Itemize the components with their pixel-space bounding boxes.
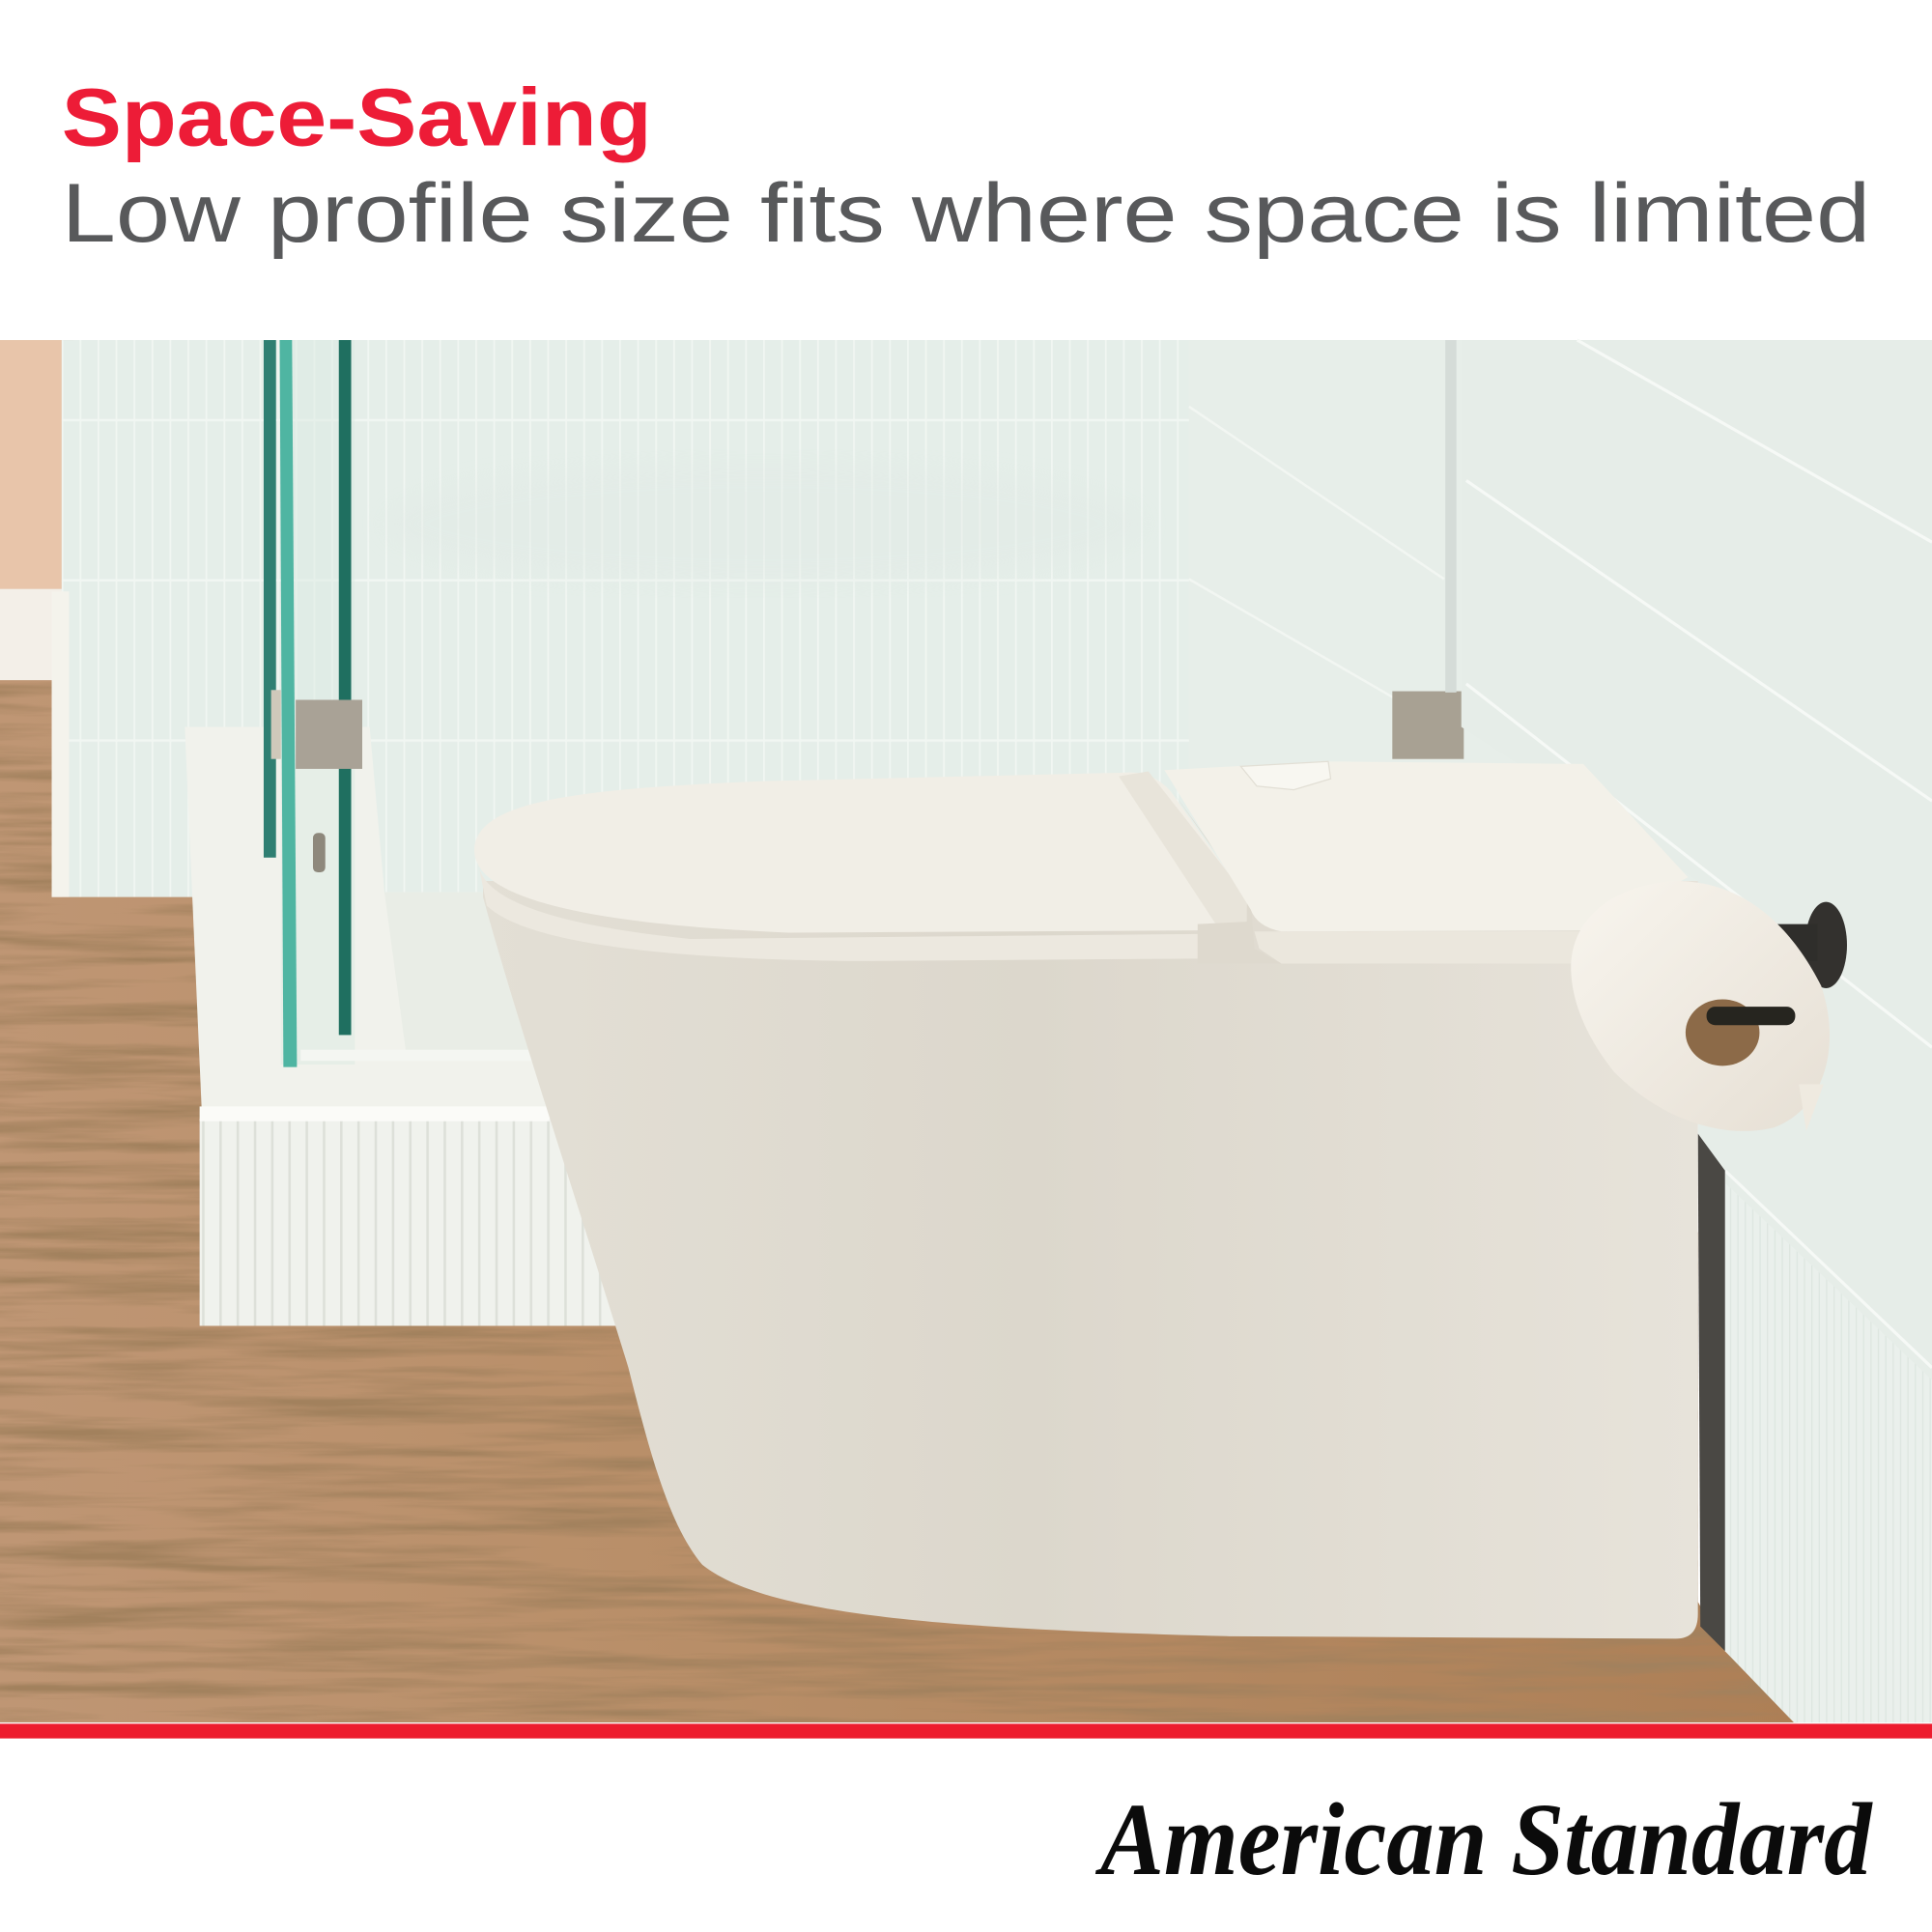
peach wall (0, 340, 74, 599)
paper tail (1799, 1084, 1824, 1131)
holder arm (1749, 924, 1817, 961)
glass edge left (264, 340, 276, 858)
door handle (313, 833, 326, 872)
curb top (185, 727, 550, 1119)
tank cover (1164, 761, 1688, 931)
holder peg (1707, 1007, 1795, 1025)
right wall clamp (1392, 692, 1463, 759)
baseboard (0, 589, 74, 683)
shower glass reflection (382, 462, 1146, 585)
wall pinstripe tile (1725, 1182, 1932, 1722)
curb edge (200, 1106, 550, 1122)
tank lower edge (1254, 931, 1583, 963)
toilet seat lower (478, 863, 1198, 961)
subheading: Low profile size fits where space is limited (62, 166, 1870, 260)
logo: American Standard: American Standard (1094, 1783, 1873, 1897)
side wall tile joints (1189, 407, 1444, 727)
curb front tile (200, 1119, 629, 1325)
roll core (1686, 999, 1759, 1065)
toilet lid (474, 773, 1247, 933)
shower rail (1445, 340, 1457, 693)
footer background (0, 1739, 1932, 1932)
glass panel (281, 340, 355, 1065)
toilet paper holder (1571, 881, 1847, 1131)
glass base (300, 1050, 535, 1061)
right tile wall (1462, 340, 1932, 1722)
side tile wall (1189, 340, 1725, 985)
header background (0, 0, 1932, 340)
right wall tile joints (1466, 340, 1932, 1722)
shower floor (370, 892, 537, 1060)
heading: Space-Saving: Space-Saving (62, 72, 652, 163)
flush button (1240, 761, 1331, 790)
gap between seat and tank (1171, 788, 1282, 963)
pillar edge (52, 591, 69, 897)
glass edge right (339, 340, 352, 1035)
lid hinge ridge (1119, 771, 1247, 926)
door hinge (271, 690, 281, 759)
toilet body (483, 881, 1698, 1638)
photo: bathroom with toilet (0, 340, 1932, 1722)
wall gap shadow (1698, 1133, 1725, 1651)
glass edge middle (280, 340, 297, 1067)
door clamp (296, 699, 362, 769)
glass door (264, 340, 535, 1067)
red divider bar (0, 1723, 1932, 1739)
wood floor (0, 680, 1797, 1722)
wood grain (0, 680, 1799, 1722)
back tile wall (62, 340, 1195, 969)
paper roll (1571, 881, 1830, 1131)
wall mount (1805, 902, 1847, 988)
